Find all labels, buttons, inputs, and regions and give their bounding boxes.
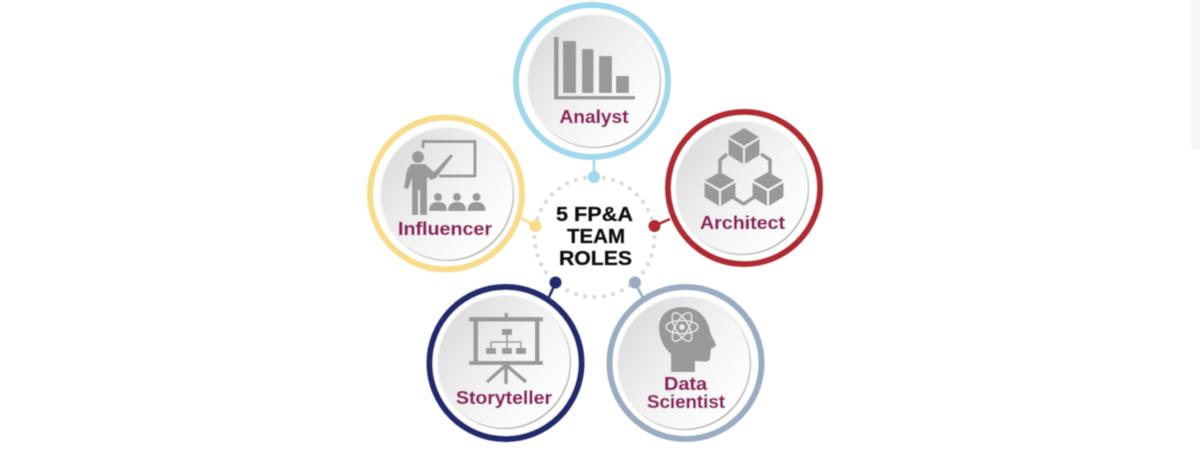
data scientist label (647, 373, 725, 412)
panel: data scientist (610, 276, 762, 439)
panel: architect (648, 112, 820, 264)
data scientist disc (618, 296, 750, 430)
architect label: Architect (700, 212, 785, 233)
centre title (556, 203, 633, 270)
dotted centre ring (534, 177, 654, 297)
icon: head with atom (659, 307, 716, 372)
storyteller connector (549, 276, 562, 297)
icon: connected cubes (704, 128, 784, 206)
influencer label: Influencer (398, 218, 492, 239)
centre title: 5 FP&A (556, 203, 633, 226)
storyteller ring (430, 287, 582, 439)
storyteller label: Storyteller (456, 387, 552, 408)
influencer disc (380, 128, 514, 260)
icon: projector screen with org chart (469, 313, 543, 384)
centre title: ROLES (559, 247, 632, 270)
architect connector (648, 219, 670, 232)
architect disc (676, 122, 808, 254)
analyst disc (528, 14, 660, 148)
analyst ring (516, 5, 668, 157)
data scientist label: Data (664, 373, 708, 394)
influencer ring (370, 118, 522, 270)
scrollbar strip (1191, 0, 1200, 149)
centre title: TEAM (567, 225, 625, 248)
influencer connector (521, 218, 542, 232)
architect ring (668, 112, 820, 264)
icon: bar chart (554, 37, 635, 100)
data scientist label: Scientist (647, 391, 725, 412)
icon: presenter at board (404, 142, 486, 215)
data scientist connector (629, 276, 643, 298)
analyst connector (588, 158, 600, 183)
panel: storyteller (430, 276, 582, 439)
panel: analyst (516, 5, 668, 183)
data scientist ring (610, 287, 762, 439)
panel: influencer (370, 118, 542, 270)
storyteller disc (438, 296, 570, 428)
analyst label: Analyst (560, 106, 628, 127)
infographic: 5 FP&A team roles (370, 5, 820, 439)
